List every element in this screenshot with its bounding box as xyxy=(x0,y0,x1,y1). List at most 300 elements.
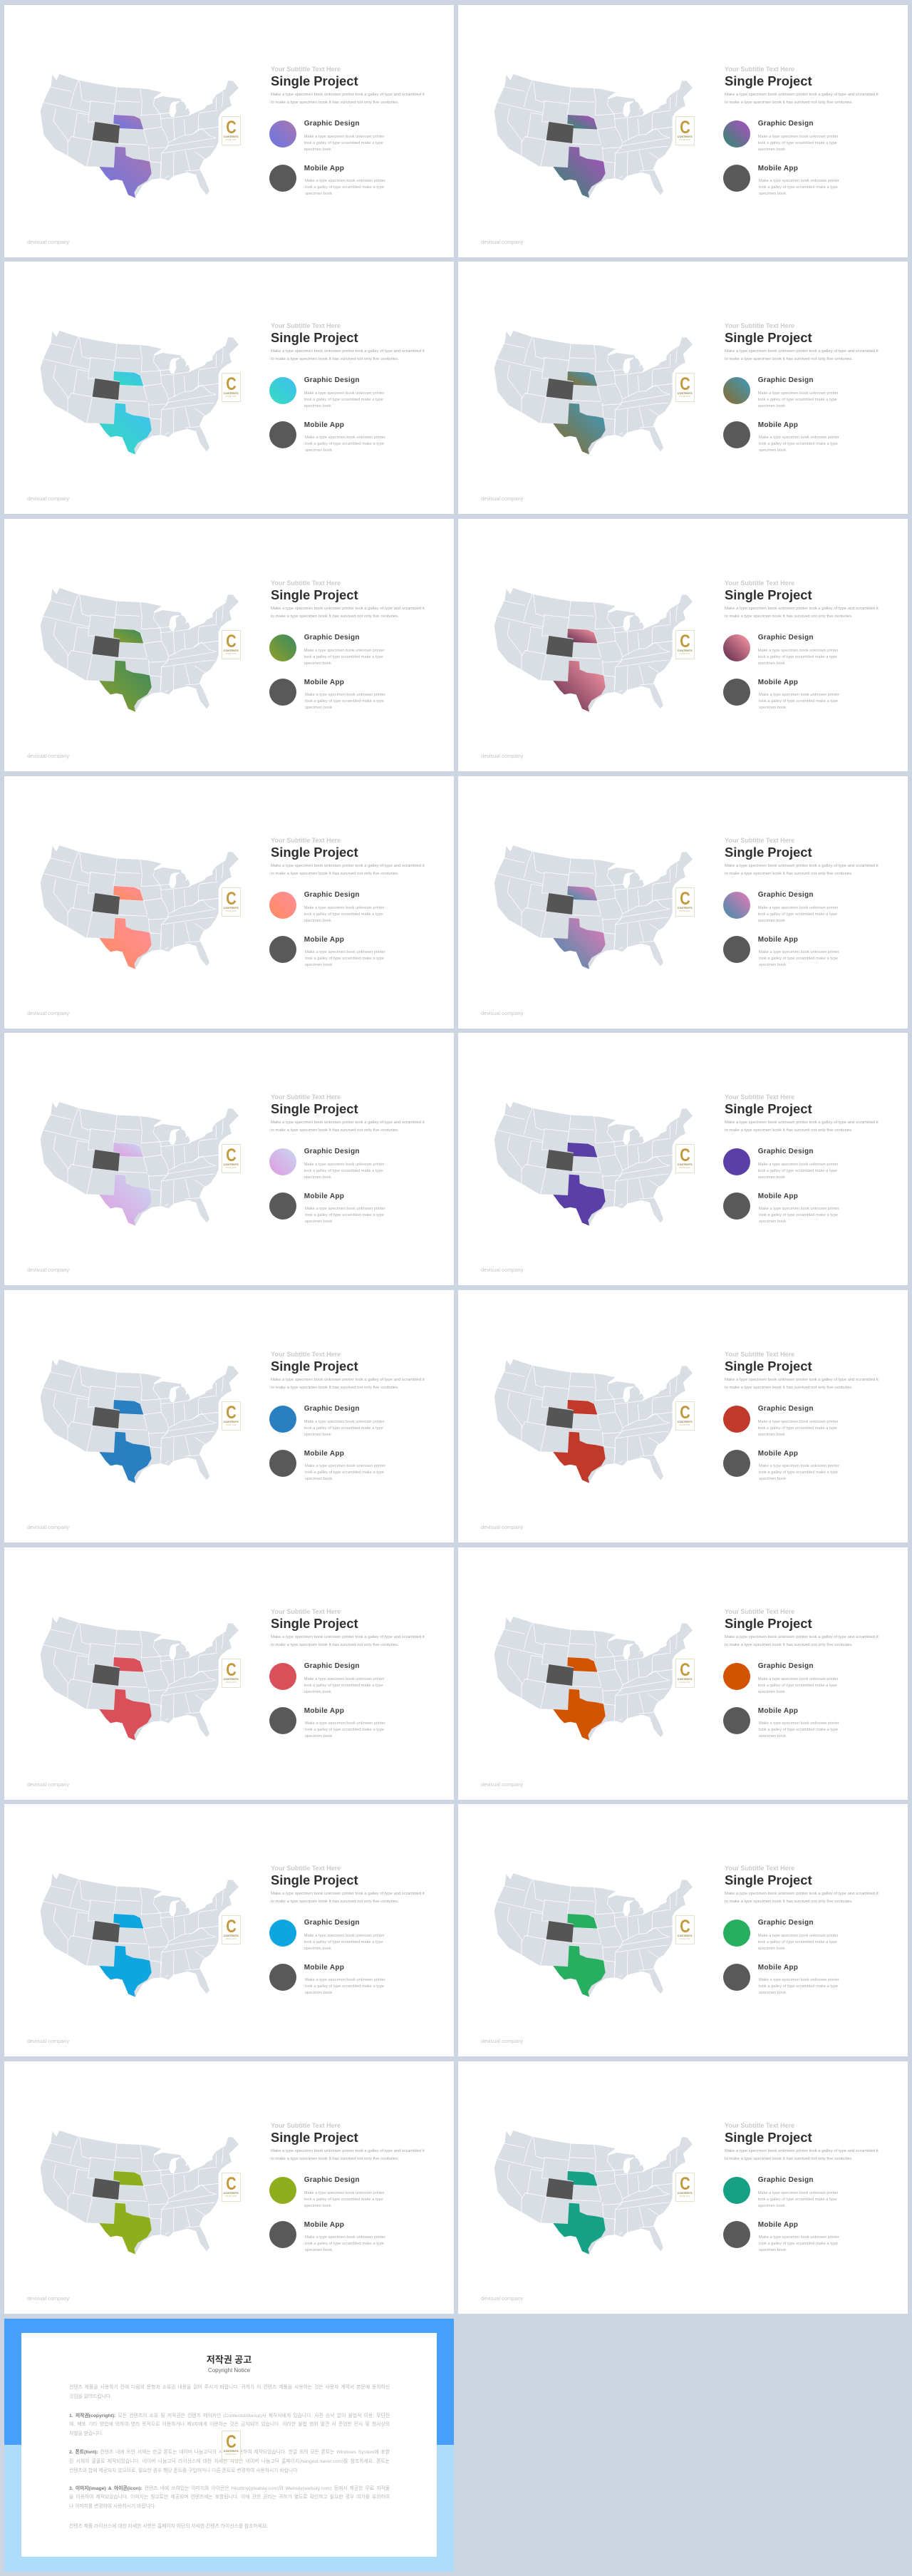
item text xyxy=(758,1419,839,1438)
map: USA with Texas and Nebraska highlighted xyxy=(40,845,239,969)
icon: gradient circle xyxy=(269,634,296,661)
item text: specimen book xyxy=(304,919,331,923)
item text: specimen book xyxy=(305,1220,332,1224)
item text: specimen book xyxy=(305,1734,332,1738)
item heading: Graphic Design: Graphic Design xyxy=(758,1662,814,1670)
map: USA with Texas and Nebraska highlighted xyxy=(40,588,239,712)
logo: CONTENTS xyxy=(224,1678,239,1681)
logo: MADE FOR xyxy=(680,139,690,141)
logo: C xyxy=(226,118,236,138)
item text: specimen book xyxy=(758,404,785,408)
item text: Make a type specimen book unknown printer xyxy=(304,649,385,653)
footer: devisual company xyxy=(27,239,69,245)
intro text xyxy=(271,1890,425,1906)
footer: devisual company xyxy=(27,495,69,502)
item text: Make a type specimen book unknown printer xyxy=(304,1163,385,1167)
item text: took a galley of type scrambled make a type xyxy=(758,1684,837,1688)
logo: C xyxy=(680,1917,690,1937)
item text: took a galley of type scrambled make a type xyxy=(305,957,384,961)
item heading: Graphic Design: Graphic Design xyxy=(758,891,814,899)
item text: Make a type specimen book unknown printer xyxy=(305,1978,385,1982)
logo xyxy=(675,1659,695,1688)
heading: Single Project xyxy=(271,330,358,345)
logo: CONTENTS xyxy=(224,649,239,652)
item text: specimen book xyxy=(758,1690,785,1694)
intro text xyxy=(725,1120,879,1133)
intro text: Make a type specimen book unknown printer took a galley of type and scrambled it xyxy=(725,1635,879,1639)
logo xyxy=(222,2173,241,2202)
item text xyxy=(304,135,385,152)
item text xyxy=(305,1977,385,1997)
panel: slide 6 xyxy=(458,519,908,771)
subtitle: Your Subtitle Text Here xyxy=(271,837,341,844)
item text: Make a type specimen book unknown printer xyxy=(305,1207,385,1211)
item text: specimen book xyxy=(304,1175,331,1180)
item text: Make a type specimen book unknown printer xyxy=(758,649,839,653)
item text: took a galley of type scrambled make a type xyxy=(304,1684,383,1688)
icon: dark circle xyxy=(269,1707,296,1734)
logo xyxy=(222,373,241,402)
subtitle: Your Subtitle Text Here xyxy=(271,2122,341,2129)
panel: slide 8 xyxy=(458,776,908,1029)
item text: specimen book xyxy=(305,1477,332,1481)
panel: slide 2 xyxy=(458,5,908,257)
logo: CONTENTS xyxy=(678,2192,693,2195)
icon: dark circle xyxy=(723,1450,750,1477)
item text xyxy=(759,2235,839,2254)
item text: specimen book xyxy=(759,2248,786,2252)
logo: C xyxy=(226,889,236,909)
intro text: to make a type specimen book It has survived not only five centuries. xyxy=(725,1128,853,1133)
item text: specimen book xyxy=(304,1433,331,1437)
icon: colored circle xyxy=(723,1406,750,1433)
logo xyxy=(675,116,695,145)
item text: took a galley of type scrambled make a type xyxy=(305,699,384,704)
heading: Single Project xyxy=(725,1616,812,1631)
item text xyxy=(304,2190,385,2210)
map: USA with Texas and Nebraska highlighted xyxy=(28,1863,256,2006)
logo: C xyxy=(680,374,690,394)
item text: specimen book xyxy=(304,404,331,408)
footer: devisual company xyxy=(481,2038,523,2044)
intro text: to make a type specimen book It has survived not only five centuries. xyxy=(725,2157,853,2161)
icon: dark circle xyxy=(723,1192,750,1220)
intro text: Make a type specimen book unknown printer took a galley of type and scrambled it xyxy=(271,864,425,868)
intro text: Make a type specimen book unknown printer took a galley of type and scrambled it xyxy=(271,2149,425,2153)
intro text xyxy=(725,864,879,876)
logo: CONTENTS xyxy=(224,392,239,395)
panel: slide 11 xyxy=(4,1290,454,1542)
logo: C xyxy=(226,1917,236,1937)
paragraph 3: image and icon xyxy=(69,2485,390,2512)
item heading: Mobile App: Mobile App xyxy=(758,1450,798,1458)
item heading: Graphic Design: Graphic Design xyxy=(304,1405,360,1413)
footer: devisual company xyxy=(481,495,523,502)
panel: slide 18 xyxy=(458,2061,908,2314)
icon: dark circle xyxy=(269,421,296,448)
item text: took a galley of type scrambled make a type xyxy=(304,1426,383,1431)
icon: gradient circle xyxy=(723,377,750,404)
intro text xyxy=(271,864,425,876)
logo xyxy=(675,1401,695,1431)
icon: colored circle xyxy=(269,1920,296,1947)
subtitle: Your Subtitle Text Here xyxy=(725,322,794,329)
item text: specimen book xyxy=(759,1734,786,1738)
logo: MADE FOR xyxy=(680,2195,690,2198)
item text: Make a type specimen book unknown printer xyxy=(304,135,385,139)
map: USA with Texas and Nebraska highlighted xyxy=(494,331,693,455)
map: USA with Texas and Nebraska highlighted xyxy=(482,2121,710,2263)
panel: slide 3 xyxy=(4,262,454,514)
intro text xyxy=(271,349,425,361)
logo: MADE FOR xyxy=(680,910,690,912)
logo xyxy=(222,2431,241,2460)
logo: CONTENTS xyxy=(224,2192,239,2195)
item text: took a galley of type scrambled make a type xyxy=(305,1213,384,1217)
item text xyxy=(305,1207,385,1224)
item text xyxy=(304,391,385,408)
logo xyxy=(675,1915,695,1944)
icon: dark circle xyxy=(269,2221,296,2248)
item text xyxy=(305,693,385,710)
map: USA with Texas and Nebraska highlighted xyxy=(40,331,239,455)
logo: MADE FOR xyxy=(680,1424,690,1426)
heading: Single Project xyxy=(271,1359,358,1374)
intro text: Make a type specimen book unknown printer took a galley of type and scrambled it xyxy=(725,864,879,868)
item text: specimen book xyxy=(304,1947,331,1951)
icon: dark circle xyxy=(723,2221,750,2248)
item text: specimen book xyxy=(758,919,785,923)
item heading: Mobile App: Mobile App xyxy=(304,1707,344,1715)
item text: Make a type specimen book unknown printer xyxy=(758,1677,839,1681)
item heading: Graphic Design: Graphic Design xyxy=(758,1148,814,1155)
item text: specimen book xyxy=(758,1175,785,1180)
subtitle: Your Subtitle Text Here xyxy=(725,66,794,73)
paragraph 1: copyright: 재, 배포 기타 방법에 의하여 영리 목적으로 이용하거나 제3자에게 이용하는 것은 금지되어 있습니다. 이러한 불법 행위 발견 시 준엄한 민사 및 형사상의 xyxy=(69,2422,390,2427)
heading: Single Project xyxy=(271,1872,358,1887)
paragraph 2: font xyxy=(69,2448,390,2476)
subtitle: Your Subtitle Text Here xyxy=(271,1093,341,1101)
item text: Make a type specimen book unknown printer xyxy=(759,950,839,954)
footer: devisual company xyxy=(27,2295,69,2302)
intro text: Make a type specimen book unknown printer took a galley of type and scrambled it xyxy=(725,2149,879,2153)
icon: colored circle xyxy=(723,1920,750,1947)
logo: CONTENTS xyxy=(224,2449,239,2452)
intro text: Make a type specimen book unknown printer took a galley of type and scrambled it xyxy=(725,93,879,97)
item heading: Mobile App: Mobile App xyxy=(304,1964,344,1972)
intro text xyxy=(725,2148,879,2163)
notice subtitle: Copyright Notice xyxy=(208,2367,250,2374)
logo: MADE FOR xyxy=(226,396,237,398)
item text xyxy=(305,1463,385,1483)
notice title: 저작권 공고 xyxy=(207,2354,252,2365)
intro text: to make a type specimen book It has survived not only five centuries. xyxy=(725,357,853,361)
item text xyxy=(759,950,839,967)
icon: colored circle xyxy=(723,1663,750,1690)
map: USA with Texas and Nebraska highlighted xyxy=(494,74,693,198)
item text: Make a type specimen book unknown printer xyxy=(304,391,385,396)
logo: C xyxy=(226,374,236,394)
icon: colored circle xyxy=(269,1663,296,1690)
item text: specimen book xyxy=(759,192,786,196)
panel: slide 9 xyxy=(4,1033,454,1285)
footer: devisual company xyxy=(481,1010,523,1016)
intro paragraph: 것임을 알려드립니다. xyxy=(69,2394,112,2399)
intro text xyxy=(271,1634,425,1649)
footer: devisual company xyxy=(481,1781,523,1788)
logo: CONTENTS xyxy=(678,135,693,138)
item text: took a galley of type scrambled make a type xyxy=(304,655,383,659)
footer: devisual company xyxy=(481,2295,523,2302)
map: USA with Texas and Nebraska highlighted xyxy=(40,74,239,198)
item text: took a galley of type scrambled make a type xyxy=(304,398,383,402)
intro text xyxy=(725,349,879,361)
map: USA with Texas and Nebraska highlighted xyxy=(482,1349,710,1492)
logo: CONTENTS xyxy=(224,135,239,138)
logo: MADE FOR xyxy=(226,1167,237,1169)
paragraph 1: copyright xyxy=(69,2412,390,2439)
intro text xyxy=(271,93,425,105)
footer: devisual company xyxy=(481,1524,523,1530)
heading: Single Project xyxy=(725,73,812,88)
item text xyxy=(304,906,385,923)
logo: MADE FOR xyxy=(680,396,690,398)
item text: took a galley of type scrambled make a type xyxy=(759,699,838,704)
item text: specimen book xyxy=(759,963,786,967)
logo: C xyxy=(226,2432,236,2452)
icon: dark circle xyxy=(723,679,750,706)
item text: took a galley of type scrambled make a type xyxy=(304,141,383,145)
panel: copyright notice xyxy=(4,2319,454,2572)
heading: Single Project xyxy=(725,2130,812,2145)
subtitle: Your Subtitle Text Here xyxy=(271,1865,341,1872)
subtitle: Your Subtitle Text Here xyxy=(725,1865,794,1872)
item heading: Mobile App: Mobile App xyxy=(304,679,344,686)
icon: dark circle xyxy=(723,1707,750,1734)
item text: specimen book xyxy=(304,148,331,152)
item heading: Graphic Design: Graphic Design xyxy=(758,1405,814,1413)
intro text xyxy=(271,1120,425,1133)
paragraph 2: font: 컨텐츠의 합에 제공되지 않으므로, 필요한 경우 해당 폰트를 구입하거나 다른 폰트로 변경하여 사용하시기 바랍니다. xyxy=(69,2468,299,2473)
item text: specimen book xyxy=(758,1947,785,1951)
item text: specimen book xyxy=(305,706,332,710)
item heading: Graphic Design: Graphic Design xyxy=(304,891,360,899)
item text: took a galley of type scrambled make a type xyxy=(759,1213,838,1217)
intro text: Make a type specimen book unknown printer took a galley of type and scrambled it xyxy=(271,1635,425,1639)
icon: colored circle xyxy=(269,2177,296,2204)
logo: C xyxy=(680,632,690,651)
icon: gradient circle xyxy=(269,377,296,404)
map: USA with Texas and Nebraska highlighted xyxy=(494,845,693,969)
icon: gradient circle xyxy=(723,892,750,919)
icon: gradient circle xyxy=(269,892,296,919)
panel: slide 13 xyxy=(4,1547,454,1800)
logo: CONTENTS xyxy=(224,907,239,910)
item text xyxy=(305,2235,385,2254)
icon: gradient circle xyxy=(269,1148,296,1175)
item heading: Graphic Design: Graphic Design xyxy=(304,1662,360,1670)
item text: took a galley of type scrambled make a type xyxy=(304,912,383,917)
item heading: Graphic Design: Graphic Design xyxy=(304,2176,360,2184)
item heading: Mobile App: Mobile App xyxy=(758,1707,798,1715)
intro text: to make a type specimen book It has survived not only five centuries. xyxy=(271,101,399,105)
item text: specimen book xyxy=(758,661,785,666)
intro text: Make a type specimen book unknown printer took a galley of type and scrambled it xyxy=(271,93,425,97)
logo: MADE FOR xyxy=(680,1938,690,1940)
paragraph 3: image and icon: 을 이용하여 제작되었습니다. 이미지는 참고로만 제공되며 컨텐츠에는 포함됩니다. 이에 관한 권리는 귀하가 별도로 확인하고 필요한 경우 여기를 유의하여 xyxy=(69,2495,390,2500)
item text xyxy=(758,1676,839,1696)
item heading: Mobile App: Mobile App xyxy=(758,1964,798,1972)
item text: took a galley of type scrambled make a type xyxy=(759,2242,838,2246)
footer: devisual company xyxy=(27,753,69,759)
intro text: Make a type specimen book unknown printer took a galley of type and scrambled it xyxy=(725,1120,879,1125)
item text: Make a type specimen book unknown printer xyxy=(304,906,385,910)
logo xyxy=(675,630,695,659)
footer: devisual company xyxy=(27,1781,69,1788)
item text: took a galley of type scrambled make a type xyxy=(305,442,384,446)
panel: slide 5 xyxy=(4,519,454,771)
icon: dark circle xyxy=(723,421,750,448)
item text: Make a type specimen book unknown printer xyxy=(758,906,839,910)
logo: C xyxy=(680,2174,690,2194)
item text: Make a type specimen book unknown printer xyxy=(758,1163,839,1167)
item text: took a galley of type scrambled make a type xyxy=(759,1728,838,1732)
item text: Make a type specimen book unknown printer xyxy=(305,1464,385,1468)
item text: Make a type specimen book unknown printer xyxy=(305,179,385,183)
heading: Single Project xyxy=(725,587,812,602)
item text: specimen book xyxy=(759,448,786,453)
subtitle: Your Subtitle Text Here xyxy=(725,1093,794,1101)
logo: MADE FOR xyxy=(226,2195,237,2198)
logo: C xyxy=(226,1145,236,1165)
item text: Make a type specimen book unknown printer xyxy=(304,2191,385,2195)
map: USA with Texas and Nebraska highlighted xyxy=(494,588,693,712)
paragraph 2: font: 2. 폰트(font): 컨텐츠 내에 쓰인 서체는 한글 폰트는 네이버 나눔고딕의 서체를 사용하여 제작되었습니다. 한글 외의 모든 폰트는 Windows System에 포함 xyxy=(69,2450,390,2455)
map: USA with Texas and Nebraska highlighted xyxy=(482,1863,710,2006)
intro text: Make a type specimen book unknown printer took a galley of type and scrambled it xyxy=(725,349,879,354)
logo: C xyxy=(226,2174,236,2194)
item heading: Graphic Design: Graphic Design xyxy=(304,634,360,642)
item text: Make a type specimen book unknown printer xyxy=(759,1464,839,1468)
item text: specimen book xyxy=(759,1477,786,1481)
icon: dark circle xyxy=(269,679,296,706)
map: USA with Texas and Nebraska highlighted xyxy=(482,1607,710,1749)
item heading: Graphic Design: Graphic Design xyxy=(758,376,814,384)
icon: dark circle xyxy=(723,936,750,963)
item text: specimen book xyxy=(758,1433,785,1437)
panel: slide 17 xyxy=(4,2061,454,2314)
item text: specimen book xyxy=(759,1220,786,1224)
item text: specimen book xyxy=(305,448,332,453)
item text xyxy=(759,1207,839,1224)
item text: Make a type specimen book unknown printer xyxy=(759,1721,839,1726)
item heading: Graphic Design: Graphic Design xyxy=(758,634,814,642)
intro text: Make a type specimen book unknown printer took a galley of type and scrambled it xyxy=(271,1120,425,1125)
subtitle: Your Subtitle Text Here xyxy=(725,1608,794,1615)
logo: CONTENTS xyxy=(678,649,693,652)
panel: slide 14 xyxy=(458,1547,908,1800)
panel: slide 10 xyxy=(458,1033,908,1285)
icon: colored circle xyxy=(269,1406,296,1433)
logo: MADE FOR xyxy=(226,139,237,141)
icon: dark circle xyxy=(723,1964,750,1991)
item text: took a galley of type scrambled make a type xyxy=(759,185,838,190)
item text xyxy=(759,1721,839,1740)
map: USA with Texas and Nebraska highlighted xyxy=(28,1607,256,1749)
item text: specimen book xyxy=(304,661,331,666)
intro text: to make a type specimen book It has survived not only five centuries. xyxy=(271,1643,399,1647)
logo xyxy=(675,373,695,402)
item text: Make a type specimen book unknown printer xyxy=(305,436,385,440)
item heading: Graphic Design: Graphic Design xyxy=(758,120,814,128)
item text xyxy=(758,135,839,152)
item text: Make a type specimen book unknown printer xyxy=(759,179,839,183)
item text xyxy=(305,950,385,967)
heading: Single Project xyxy=(725,845,812,860)
item text: took a galley of type scrambled make a type xyxy=(304,1169,383,1173)
item text: specimen book xyxy=(305,2248,332,2252)
footer: devisual company xyxy=(27,2038,69,2044)
item heading: Mobile App: Mobile App xyxy=(758,421,798,429)
item text xyxy=(759,436,839,453)
item text: took a galley of type scrambled make a type xyxy=(758,141,837,145)
item text xyxy=(304,1419,385,1438)
item heading: Mobile App: Mobile App xyxy=(304,2221,344,2229)
paragraph 3: image and icon: 3. 이미지(image) & 아이콘(icon): 컨텐츠 내에 쓰여있는 이미지와 아이콘은 Hiozboy(pixabay.com)와 Websily(websily.com) 등에서 제공한 무료 저작물 xyxy=(69,2486,390,2491)
item text: took a galley of type scrambled make a type xyxy=(304,1940,383,1944)
item text xyxy=(759,693,839,710)
icon: dark circle xyxy=(269,936,296,963)
item text: Make a type specimen book unknown printer xyxy=(305,1721,385,1726)
map: USA with Texas and Nebraska highlighted xyxy=(494,1102,693,1226)
item text xyxy=(758,391,839,408)
subtitle: Your Subtitle Text Here xyxy=(725,837,794,844)
icon: dark circle xyxy=(269,1450,296,1477)
icon: dark circle xyxy=(269,165,296,192)
item text: took a galley of type scrambled make a type xyxy=(305,2242,384,2246)
footer: devisual company xyxy=(27,1010,69,1016)
logo: MADE FOR xyxy=(680,653,690,655)
intro paragraph: 컨텐츠 제품을 사용하기 전에 다음의 문항과 소유권 내용을 읽어 주시기 바랍니다. 귀하가 이 컨텐츠 제품을 사용하는 것은 사용자 계약서 본문에 동의하신 xyxy=(69,2385,390,2390)
logo xyxy=(675,1144,695,1173)
footer: devisual company xyxy=(481,1267,523,1273)
intro text: Make a type specimen book unknown printer took a galley of type and scrambled it xyxy=(271,349,425,354)
panel: slide 16 xyxy=(458,1804,908,2056)
icon: dark circle xyxy=(723,165,750,192)
logo: C xyxy=(680,1403,690,1423)
item text: Make a type specimen book unknown printer xyxy=(758,1420,839,1424)
logo xyxy=(222,630,241,659)
item text: specimen book xyxy=(758,2204,785,2208)
intro text: to make a type specimen book It has survived not only five centuries. xyxy=(271,357,399,361)
item text: Make a type specimen book unknown printer xyxy=(304,1934,385,1938)
item text: Make a type specimen book unknown printer xyxy=(759,436,839,440)
item text xyxy=(759,179,839,196)
item heading: Mobile App: Mobile App xyxy=(304,936,344,944)
item text: Make a type specimen book unknown printer xyxy=(305,693,385,697)
intro text xyxy=(271,1376,425,1392)
map: USA with Texas and Nebraska highlighted xyxy=(28,1349,256,1492)
intro text: to make a type specimen book It has survived not only five centuries. xyxy=(725,101,853,105)
intro text: to make a type specimen book It has survived not only five centuries. xyxy=(271,1128,399,1133)
logo: MADE FOR xyxy=(226,2453,237,2456)
item text: took a galley of type scrambled make a type xyxy=(305,185,384,190)
intro text: to make a type specimen book It has survived not only five centuries. xyxy=(271,1386,399,1390)
item heading: Graphic Design: Graphic Design xyxy=(304,1919,360,1927)
item heading: Mobile App: Mobile App xyxy=(304,1192,344,1200)
icon: dark circle xyxy=(269,1964,296,1991)
item text: specimen book xyxy=(304,1690,331,1694)
